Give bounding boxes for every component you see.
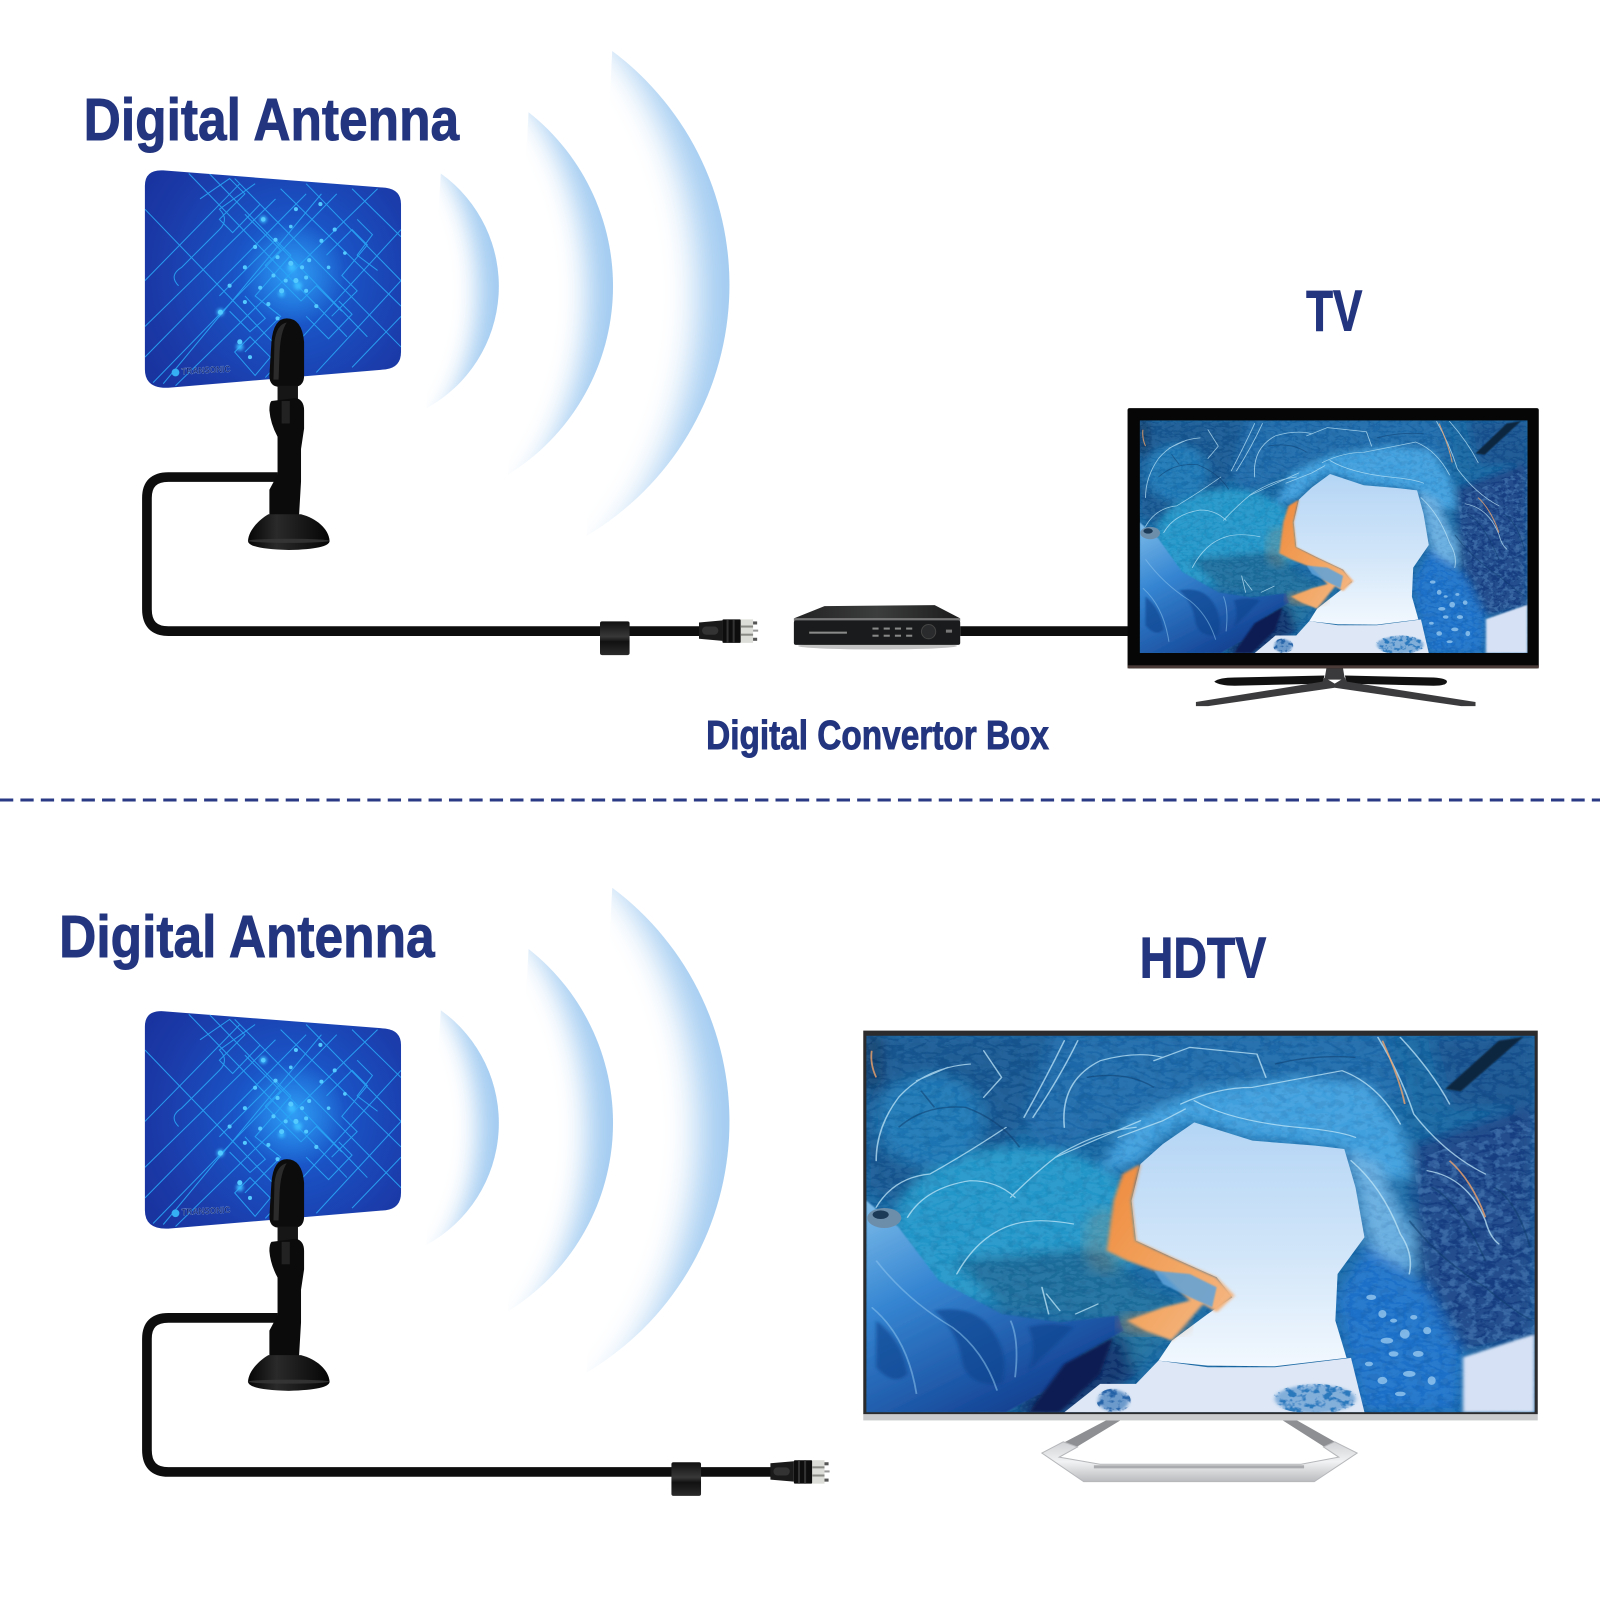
signal waves bottom	[0, 726, 729, 1534]
coax connector top	[699, 619, 758, 643]
brand label: TRANSONIC	[181, 1205, 231, 1217]
coax connector bottom	[770, 1460, 830, 1484]
antenna stand bottom	[248, 1159, 330, 1391]
tv screen picture	[1140, 420, 1528, 654]
cable clip top	[600, 621, 630, 655]
hdtv stand	[1042, 1420, 1357, 1482]
coaxial cable bottom	[147, 1318, 776, 1472]
antenna panel bottom	[145, 1011, 401, 1229]
panel: top setup with converter box	[84, 86, 1539, 758]
antenna panel top	[145, 170, 401, 388]
heading: HDTV: HDTV	[1140, 927, 1266, 991]
panel: bottom setup direct to HDTV	[59, 903, 1538, 1496]
brand label: TRANSONIC	[181, 364, 231, 376]
television	[1128, 408, 1539, 706]
cable clip bottom	[671, 1462, 701, 1496]
hdtv screen picture	[866, 1036, 1535, 1414]
coaxial cable top	[147, 477, 704, 631]
heading: digital antenna bottom: Digital Antenna	[59, 903, 436, 970]
HDTV monitor	[863, 1031, 1538, 1482]
tv stand	[1196, 667, 1476, 706]
signal waves top	[0, 0, 729, 697]
heading: digital antenna top: Digital Antenna	[84, 86, 460, 153]
digital converter box	[794, 605, 960, 649]
cable box to TV	[960, 626, 1129, 636]
dashed divider	[0, 798, 1600, 802]
antenna stand top	[248, 318, 330, 550]
heading: TV: TV	[1306, 280, 1362, 344]
heading: digital convertor box: Digital Convertor Box	[706, 712, 1049, 758]
